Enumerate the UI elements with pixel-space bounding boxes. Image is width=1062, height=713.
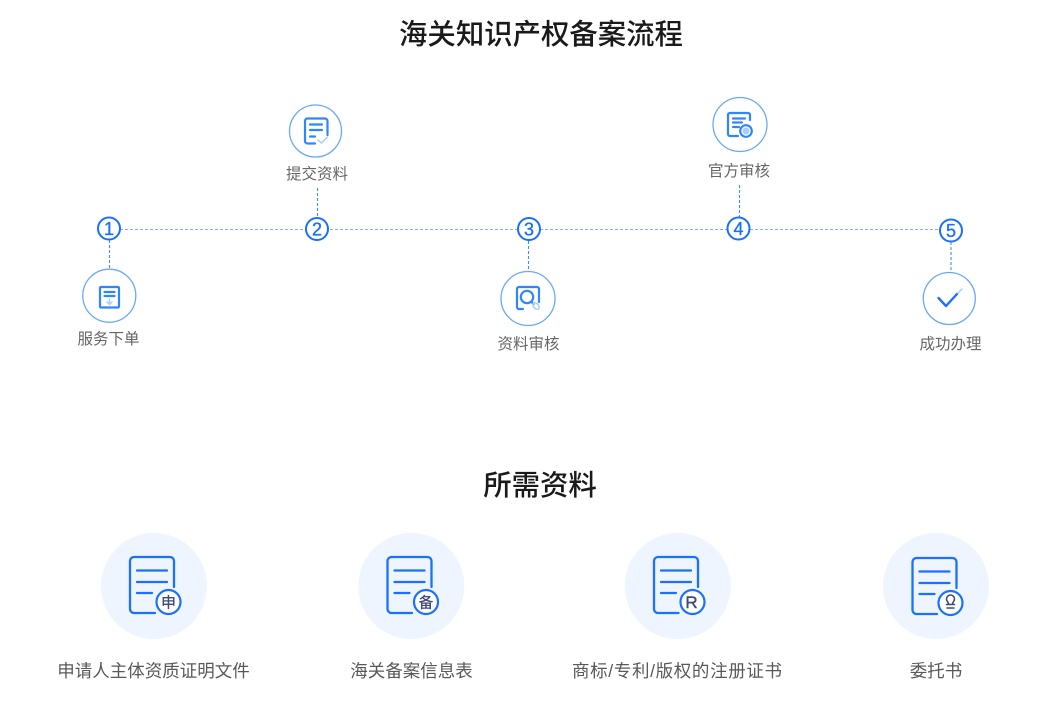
step 5: success: [919, 220, 982, 353]
step 1 label: 服务下单: [77, 330, 140, 348]
icon: magnifier: [517, 287, 540, 311]
step 2: submit materials: [286, 105, 348, 240]
material 1: applicant documents: [57, 533, 250, 681]
icon: order document: [100, 287, 119, 308]
icon: check mark: [938, 289, 962, 306]
material 4: power of attorney: [883, 533, 989, 681]
step 5 label: 成功办理: [919, 335, 982, 353]
title: customs IP filing process: 海关知识产权备案流程: [399, 19, 683, 51]
step 5 number: 5: [946, 221, 956, 241]
icon: official document with seal: [728, 113, 752, 137]
document icon with R badge: R: [685, 593, 698, 612]
step 4 number: [728, 218, 750, 240]
icon: submit document: [305, 118, 328, 144]
step 1: service order: [77, 218, 140, 348]
step 2 number: 2: [312, 220, 322, 240]
process timeline: [77, 98, 982, 353]
timeline dashed line: [120, 228, 940, 230]
step 3 label: 资料审核: [497, 335, 560, 353]
document icon with seal badge: [912, 558, 962, 615]
material 2: customs filing form: [350, 533, 473, 681]
label: 海关备案信息表: [350, 661, 473, 681]
step 1 number: 1: [104, 219, 114, 239]
step 4: official review: [708, 98, 770, 240]
material 3: trademark, patent, copyright certificate: [572, 533, 782, 681]
step 2 label: 提交资料: [286, 165, 348, 183]
label: 商标/专利/版权的注册证书: [572, 661, 782, 681]
document icon with R badge: [654, 557, 704, 614]
document icon with 申 badge: 申: [161, 594, 176, 612]
step 3: material review: [497, 218, 560, 353]
step 4 label: 官方审核: [708, 162, 770, 180]
document icon with 备 badge: 备: [418, 594, 434, 612]
label: 委托书: [910, 661, 962, 681]
step 4 number: 4: [733, 219, 744, 239]
step 3 number: 3: [524, 220, 534, 240]
heading: required materials: 所需资料: [483, 470, 597, 502]
label: 申请人主体资质证明文件: [57, 661, 250, 681]
document icon with 备 badge: [388, 557, 438, 614]
document icon with 申 badge: [130, 557, 180, 614]
